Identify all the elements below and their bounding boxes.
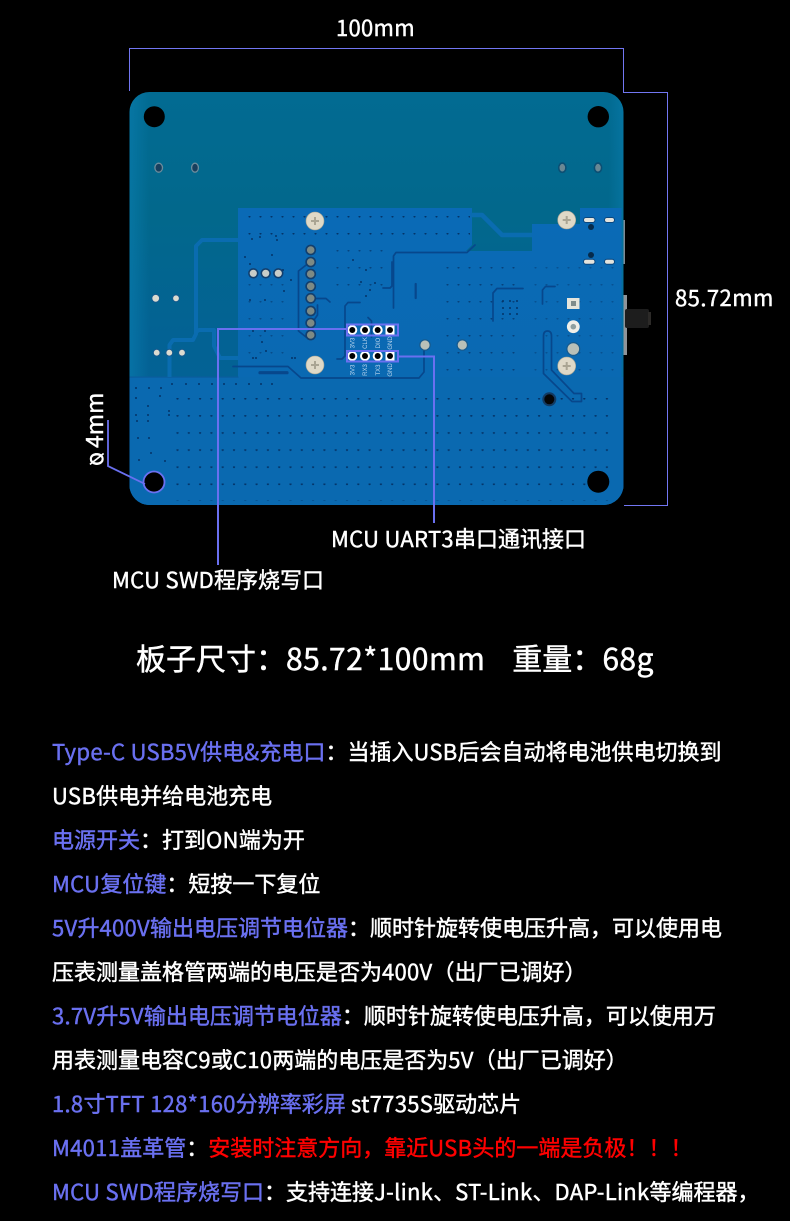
text: SWD programming: MCU SWD程序烧写口：支持连接J-link、ST-Link、DAP-Link等编程器， [52,1175,760,1207]
text: Type-C port continued: USB供电并给电池充电 [52,779,272,811]
text: reset key: MCU复位键：短按一下复位 [52,867,320,899]
label: SWD port: MCU SWD程序烧写口 [112,563,324,595]
scattered vias [135,235,518,462]
text: 400V potentiometer continued: 压表测量盖格管两端的电压是否为400V（出厂已调好） [52,955,587,987]
switch and connector parts behind the board [622,220,651,355]
text: M4011 tube warning: M4011盖革管：安装时注意方向，靠近USB头的一端是负极！！！ [52,1131,692,1163]
text: 5V potentiometer continued: 用表测量电容C9或C10两端的电压是否为5V（出厂已调好） [52,1043,628,1075]
PCB board [120,92,640,510]
silkscreen pin labels: TX3 [376,364,382,376]
label: width 100mm: 100mm [336,11,415,43]
pin header pads [347,325,394,361]
text: power switch: 电源开关：打到ON端为开 [52,823,305,855]
solder pads and connectors [152,163,615,406]
dark signal traces [233,245,582,402]
silkscreen pin labels [350,336,394,377]
text: 5V potentiometer: 3.7V升5V输出电压调节电位器：顺时针旋转使电压升高，可以使用万 [52,999,716,1031]
silkscreen pin labels: GND [388,363,394,377]
callout: hole diameter leader [108,420,164,492]
text: TFT screen: 1.8寸TFT 128*160分辨率彩屏 st7735S驱动芯片 [52,1087,521,1119]
heading: board size and weight: 板子尺寸：85.72*100mm 重量：68g [136,635,654,679]
board diagram with dimension lines [76,48,668,565]
mounting holes [144,106,609,493]
callout: SWD header box and leader [218,324,398,565]
teal region traces [170,215,532,377]
callout: UART3 header box and leader [347,351,434,523]
silkscreen pin labels: 3V3 [350,337,356,348]
silkscreen pin labels: GND [388,336,394,350]
label: height 85.72mm: 85.72mm [675,281,774,313]
label: UART3 port: MCU UART3串口通讯接口 [331,522,586,554]
text: 400V potentiometer: 5V升400V输出电压调节电位器：顺时针旋转使电压升高，可以使用电 [52,911,722,943]
via field [176,397,616,501]
label: hole diameter: 4mm [76,393,110,448]
description list [52,735,760,1207]
dimension lines: width and height [130,48,668,506]
silkscreen pin labels: DIO [376,337,382,348]
text: Type-C port: Type-C USB5V供电&充电口：当插入USB后会自动将电池供电切换到 [52,735,722,767]
silkscreen pin labels: 3V3 [350,364,356,375]
label: hole diameter: ø [76,452,110,466]
silkscreen pin labels: RX3 [363,364,369,376]
screws [306,211,576,375]
copper pour [120,208,640,510]
silkscreen pin labels: CLK [363,337,369,349]
